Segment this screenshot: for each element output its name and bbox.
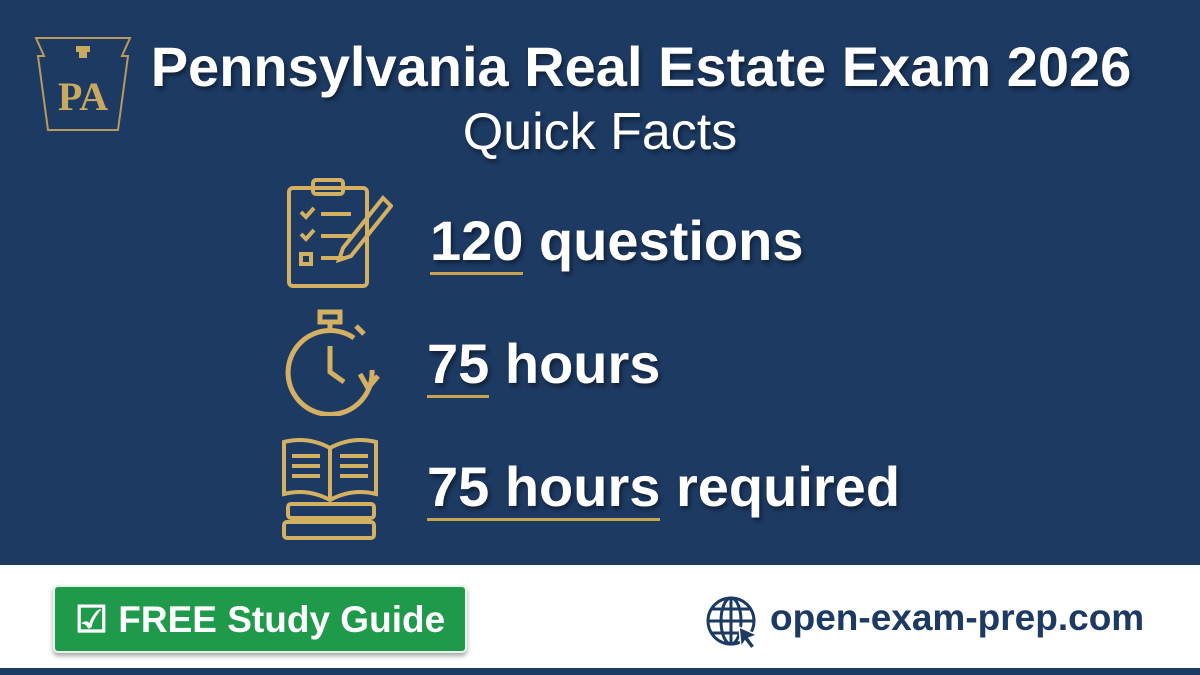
title: Pennsylvania Real Estate Exam 2026 (151, 35, 1131, 98)
fact 3: 75 hours required (427, 455, 900, 518)
fact 1: 120 questions (430, 209, 803, 272)
logo: PA keystone (34, 37, 132, 131)
button: free study guide (53, 585, 467, 653)
fact 2: 75 hours (427, 332, 660, 395)
subtitle: Quick Facts (463, 103, 737, 161)
bottom band (0, 668, 1200, 675)
button: free study guide: ☑ FREE Study Guide (75, 599, 445, 640)
icon: globe (706, 596, 756, 648)
footer (0, 565, 1200, 668)
logo: PA keystone: PA (58, 74, 108, 119)
website: open-exam-prep.com (770, 597, 1144, 638)
icon: stopwatch (286, 310, 380, 416)
icon: clipboard (287, 178, 393, 288)
icon: books (282, 438, 378, 540)
